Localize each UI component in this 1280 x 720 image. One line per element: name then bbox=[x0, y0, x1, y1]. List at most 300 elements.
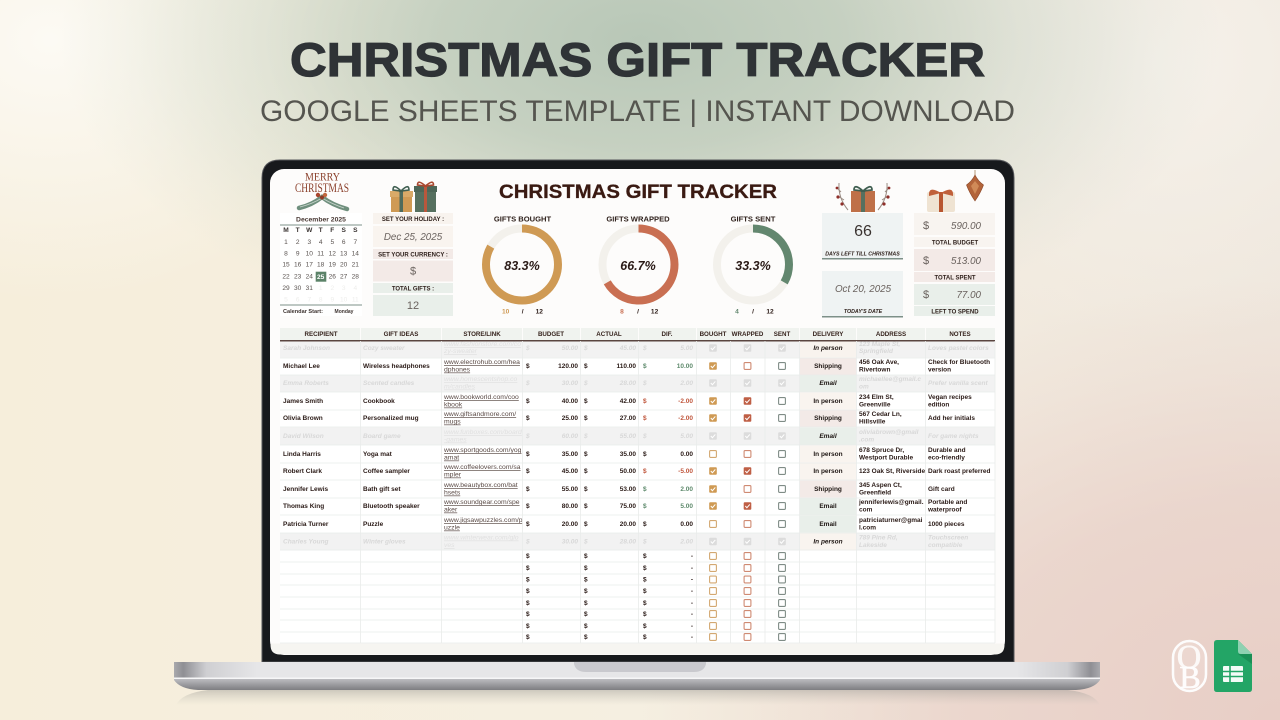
row: James Smith: Greenville bbox=[859, 402, 891, 408]
row: Thomas King: com bbox=[859, 506, 873, 514]
empty rows: - bbox=[691, 576, 693, 584]
calendar grid: 31 bbox=[306, 285, 313, 292]
row: Olivia Brown: Shipping bbox=[814, 415, 842, 422]
row: James Smith: kbook bbox=[444, 402, 463, 408]
row: Michael Lee: dphones bbox=[444, 366, 471, 374]
table header: WRAPPED bbox=[732, 331, 764, 338]
row: Charles Young: compatible bbox=[928, 542, 963, 549]
panel: total spent: TOTAL SPENT bbox=[934, 276, 976, 282]
sheet heading: CHRISTMAS GIFT TRACKER bbox=[499, 181, 777, 203]
row: David Wilson: .com bbox=[859, 436, 874, 444]
calendar grid: 13 bbox=[340, 250, 348, 258]
calendar grid: 1 bbox=[284, 239, 288, 246]
calendar grid: 7 bbox=[353, 239, 357, 246]
row: Charles Young: 789 Pine Rd, bbox=[859, 534, 898, 542]
empty rows: $ bbox=[643, 600, 647, 607]
row: Jennifer Lewis: 2.00 bbox=[680, 486, 693, 493]
row: Robert Clark: Coffee sampler bbox=[363, 468, 410, 475]
row: Linda Harris bbox=[283, 446, 966, 462]
row: Jennifer Lewis: $ bbox=[643, 486, 647, 493]
row: Michael Lee: version bbox=[928, 366, 951, 374]
calendar grid: 5 bbox=[284, 296, 288, 304]
row: Charles Young: www.winterwear.com/glo bbox=[444, 534, 519, 542]
panel: merry christmas logo bbox=[295, 172, 349, 209]
calendar grid: 9 bbox=[330, 296, 334, 304]
row: Charles Young: In person bbox=[813, 538, 843, 546]
row: Michael Lee: 10.00 bbox=[677, 363, 693, 370]
row: Michael Lee: $ bbox=[643, 363, 647, 370]
row: Sarah Johnson: 123 Maple St, bbox=[859, 341, 900, 348]
row: Emma Roberts: $ bbox=[642, 380, 647, 387]
row: Olivia Brown: -2.00 bbox=[678, 415, 693, 422]
panel: days left: 66 bbox=[854, 223, 872, 240]
empty rows: $ bbox=[584, 611, 588, 618]
row: Jennifer Lewis: 53.00 bbox=[620, 486, 636, 493]
table header: BUDGET bbox=[538, 331, 564, 338]
row: David Wilson: 55.00 bbox=[620, 433, 636, 440]
row: Jennifer Lewis: $ bbox=[526, 486, 530, 493]
row: Patricia Turner: www.jigsawpuzzles.com/p bbox=[443, 517, 523, 524]
row: Thomas King: Bluetooth speaker bbox=[363, 503, 420, 510]
row: Sarah Johnson: Loves pastel colors bbox=[928, 345, 989, 352]
empty rows: $ bbox=[584, 553, 588, 560]
calendar grid: 4 bbox=[319, 239, 323, 246]
calendar heading: December 2025 bbox=[296, 216, 346, 224]
row: Emma Roberts: 30.00 bbox=[562, 380, 578, 387]
laptop base bbox=[174, 662, 1100, 690]
calendar grid: 1 bbox=[319, 285, 323, 292]
row: Michael Lee bbox=[283, 358, 990, 375]
row: Charles Young: Lakeside bbox=[859, 542, 887, 549]
row: Michael Lee: Check for Bluetooth bbox=[928, 359, 990, 366]
icon: google sheets bbox=[1214, 640, 1252, 692]
panel: left to spend: $ bbox=[923, 289, 929, 301]
table header: BOUGHT bbox=[700, 331, 727, 338]
empty rows: $ bbox=[584, 565, 588, 572]
panel: days left bbox=[822, 213, 903, 260]
calendar grid: 24 bbox=[306, 274, 313, 280]
calendar grid: 12 bbox=[329, 250, 336, 258]
row: Patricia Turner: l.com bbox=[859, 524, 876, 532]
row: Charles Young: $ bbox=[525, 538, 530, 546]
row: Emma Roberts: Scented candles bbox=[363, 380, 415, 387]
row: Sarah Johnson: zy-sweater bbox=[443, 348, 478, 355]
row: Jennifer Lewis: $ bbox=[584, 486, 588, 493]
empty rows: $ bbox=[526, 588, 530, 595]
calendar grid: 10 bbox=[306, 250, 313, 258]
empty rows: $ bbox=[526, 600, 530, 607]
row: Charles Young: 28.00 bbox=[619, 538, 636, 546]
calendar start: Calendar Start: bbox=[283, 309, 323, 315]
row: Sarah Johnson: $ bbox=[642, 345, 647, 352]
icon: ornament bbox=[966, 170, 984, 201]
empty rows: $ bbox=[584, 623, 588, 630]
row: Charles Young: 2.00 bbox=[679, 538, 693, 546]
panel: today's date bbox=[822, 271, 903, 318]
empty rows: $ bbox=[643, 634, 647, 641]
chart: gifts sent: 4 bbox=[735, 308, 739, 316]
row: David Wilson: Board game bbox=[363, 433, 401, 440]
row: Olivia Brown: Hillsville bbox=[859, 418, 886, 426]
row: Olivia Brown: Olivia Brown bbox=[283, 415, 323, 422]
row: Emma Roberts: www.homescentshop.co bbox=[444, 376, 518, 383]
row: Linda Harris: Westport Durable bbox=[859, 454, 913, 462]
row: Patricia Turner: 20.00 bbox=[620, 521, 636, 528]
table header: ACTUAL bbox=[596, 331, 622, 338]
row: Michael Lee: 110.00 bbox=[616, 363, 636, 370]
calendar grid: 11 bbox=[317, 250, 324, 258]
empty rows: - bbox=[691, 600, 693, 607]
empty rows: $ bbox=[643, 565, 647, 572]
row: Patricia Turner: 0.00 bbox=[680, 521, 693, 528]
table body background bbox=[280, 342, 995, 644]
calendar grid: S bbox=[341, 227, 346, 234]
row: Olivia Brown: Personalized mug bbox=[363, 415, 419, 422]
row: James Smith: 234 Elm St, bbox=[859, 394, 894, 401]
empty rows: - bbox=[691, 588, 693, 595]
calendar grid: 8 bbox=[284, 250, 288, 258]
row: Thomas King: Portable and bbox=[928, 499, 967, 506]
row: James Smith: Cookbook bbox=[363, 398, 395, 405]
total gifts value: 12 bbox=[407, 300, 419, 312]
row: Patricia Turner: patriciaturner@gmai bbox=[859, 517, 923, 524]
calendar grid: 4 bbox=[353, 285, 357, 292]
row: Patricia Turner: $ bbox=[643, 521, 647, 528]
row: Thomas King: Email bbox=[819, 503, 837, 510]
chart: gifts wrapped: 8 bbox=[620, 308, 624, 316]
row: Patricia Turner: Puzzle bbox=[363, 521, 384, 528]
row: Jennifer Lewis: hsets bbox=[444, 490, 461, 496]
row: Linda Harris: Yoga mat bbox=[363, 451, 393, 458]
row: Emma Roberts bbox=[280, 375, 995, 392]
row: Michael Lee: Shipping bbox=[814, 363, 842, 370]
chart: gifts wrapped: GIFTS WRAPPED bbox=[606, 214, 670, 224]
row: Jennifer Lewis: Shipping bbox=[814, 486, 842, 493]
laptop reflection bbox=[176, 690, 1100, 705]
row: James Smith: Vegan recipes bbox=[928, 394, 972, 401]
row: Emma Roberts: om bbox=[859, 384, 869, 390]
row: Robert Clark: mpler bbox=[444, 472, 462, 478]
holiday date: Dec 25, 2025 bbox=[384, 232, 443, 243]
row: Michael Lee: Michael Lee bbox=[283, 363, 320, 370]
total gifts label: TOTAL GIFTS : bbox=[392, 286, 434, 292]
panel: total spent: $ bbox=[923, 255, 929, 267]
calendar grid: M bbox=[283, 227, 289, 234]
row: Linda Harris: www.sportgoods.com/yog bbox=[443, 447, 522, 454]
panel: days left: DAYS LEFT TILL CHRISTMAS bbox=[825, 252, 900, 258]
row: Robert Clark: Robert Clark bbox=[283, 468, 322, 475]
row: Thomas King: 5.00 bbox=[680, 503, 693, 510]
calendar grid: W bbox=[306, 227, 313, 234]
row: Linda Harris: $ bbox=[584, 451, 588, 458]
panel: left to spend: 77.00 bbox=[956, 290, 982, 301]
row: Linda Harris: 35.00 bbox=[620, 451, 636, 458]
row: James Smith: $ bbox=[584, 398, 588, 405]
chart: gifts sent: / bbox=[752, 308, 754, 316]
row: Jennifer Lewis: 55.00 bbox=[562, 486, 578, 493]
empty rows: $ bbox=[643, 553, 647, 560]
row: Charles Young: Charles Young bbox=[283, 538, 329, 546]
row: Olivia Brown: www.giftsandmore.com/ bbox=[443, 411, 516, 418]
row: Michael Lee: 456 Oak Ave, bbox=[859, 359, 899, 366]
row: Jennifer Lewis: Greenfield bbox=[859, 490, 891, 496]
row: Linda Harris: 0.00 bbox=[680, 451, 693, 458]
row: Sarah Johnson: www.fashionstore.com/co bbox=[444, 341, 521, 348]
empty rows: $ bbox=[526, 565, 530, 572]
row: Emma Roberts: Emma Roberts bbox=[283, 380, 329, 387]
row: Charles Young: Winter gloves bbox=[363, 538, 406, 546]
row: Thomas King: $ bbox=[526, 503, 530, 510]
chart: gifts wrapped bbox=[602, 214, 674, 316]
calendar grid: 14 bbox=[352, 250, 359, 258]
row: Sarah Johnson: Sarah Johnson bbox=[283, 345, 330, 352]
chart: gifts wrapped: 66.7% bbox=[620, 259, 656, 273]
row: Patricia Turner: Email bbox=[819, 521, 837, 528]
row: Robert Clark: 50.00 bbox=[620, 468, 636, 475]
empty rows bbox=[526, 553, 785, 641]
row: Sarah Johnson: Cozy sweater bbox=[363, 345, 405, 352]
panel: holiday, currency, total gifts bbox=[373, 213, 453, 316]
row: Robert Clark: $ bbox=[526, 468, 530, 475]
row: Emma Roberts: Email bbox=[819, 380, 837, 387]
row: Emma Roberts: m/candles bbox=[444, 384, 476, 390]
row: Sarah Johnson: 50.00 bbox=[562, 345, 578, 352]
chart: gifts bought bbox=[486, 214, 558, 316]
row: Charles Young: 30.00 bbox=[562, 538, 578, 546]
row: Linda Harris: Linda Harris bbox=[283, 451, 321, 458]
row: Patricia Turner: $ bbox=[526, 521, 530, 528]
row: Linda Harris: Durable and bbox=[928, 447, 966, 454]
row: Olivia Brown: $ bbox=[584, 415, 588, 422]
row: Olivia Brown: 25.00 bbox=[562, 415, 578, 422]
calendar start: Monday bbox=[335, 309, 354, 315]
panel: total budget: TOTAL BUDGET bbox=[932, 240, 978, 246]
row: Sarah Johnson: 5.00 bbox=[680, 345, 693, 352]
calendar grid: F bbox=[330, 227, 334, 234]
calendar grid: 17 bbox=[306, 262, 313, 268]
row: Sarah Johnson: In person bbox=[813, 345, 843, 352]
calendar grid: 5 bbox=[330, 239, 334, 246]
icon: cream gift bbox=[927, 190, 955, 212]
row: Thomas King: $ bbox=[584, 503, 588, 510]
row: David Wilson: $ bbox=[642, 433, 647, 440]
row: James Smith: -2.00 bbox=[678, 398, 693, 405]
row: Michael Lee: www.electrohub.com/hea bbox=[443, 359, 520, 366]
row: Linda Harris: eco-friendly bbox=[928, 454, 965, 462]
calendar grid: 26 bbox=[329, 274, 336, 280]
row: Thomas King: $ bbox=[643, 503, 647, 510]
row: Michael Lee: $ bbox=[526, 363, 530, 370]
row: Olivia Brown: mugs bbox=[444, 418, 461, 426]
table header: GIFT IDEAS bbox=[384, 331, 418, 338]
row: Jennifer Lewis bbox=[283, 480, 955, 498]
calendar grid: 2 bbox=[330, 285, 334, 292]
row: Robert Clark: $ bbox=[584, 468, 588, 475]
empty rows: $ bbox=[643, 611, 647, 618]
row: Patricia Turner: uzzle bbox=[444, 524, 460, 532]
row: David Wilson: oliviabrown@gmail bbox=[859, 429, 919, 436]
chart: gifts bought: 83.3% bbox=[504, 259, 540, 273]
chart: gifts sent: GIFTS SENT bbox=[731, 214, 776, 224]
row: James Smith: edition bbox=[928, 402, 949, 408]
calendar grid: 18 bbox=[317, 262, 325, 268]
empty rows: $ bbox=[643, 576, 647, 584]
row: Linda Harris: 35.00 bbox=[562, 451, 578, 458]
row: David Wilson: -games bbox=[444, 436, 467, 444]
row: Linda Harris: 678 Spruce Dr, bbox=[859, 447, 904, 454]
empty rows: $ bbox=[643, 588, 647, 595]
calendar grid: 7 bbox=[307, 296, 311, 304]
row: Olivia Brown: Add her initials bbox=[928, 415, 975, 422]
table header: RECIPIENT bbox=[304, 331, 338, 338]
row: Charles Young: ves bbox=[444, 542, 455, 549]
row: Charles Young: $ bbox=[583, 538, 588, 546]
row: Sarah Johnson: Springfield bbox=[859, 348, 894, 355]
table header: NOTES bbox=[949, 331, 971, 338]
calendar bbox=[280, 213, 362, 316]
table header bbox=[280, 328, 995, 342]
panel: left to spend: LEFT TO SPEND bbox=[931, 310, 979, 316]
calendar grid: 30 bbox=[294, 285, 302, 292]
empty rows: - bbox=[691, 565, 693, 572]
row: James Smith: 42.00 bbox=[620, 398, 636, 405]
empty rows: - bbox=[691, 611, 693, 618]
empty rows: $ bbox=[526, 611, 530, 618]
row: Thomas King: 75.00 bbox=[620, 503, 636, 510]
row: James Smith: $ bbox=[643, 398, 647, 405]
row: Thomas King: www.soundgear.com/spe bbox=[443, 499, 520, 506]
empty rows: $ bbox=[584, 576, 588, 584]
calendar grid: 22 bbox=[282, 274, 290, 280]
panel: left to spend bbox=[914, 284, 995, 316]
icon: OB monogram logo: O bbox=[1177, 639, 1201, 676]
row: Sarah Johnson: $ bbox=[583, 345, 588, 352]
row: James Smith bbox=[283, 392, 972, 410]
row: Robert Clark bbox=[283, 463, 991, 480]
panel: total budget: 590.00 bbox=[951, 221, 982, 232]
row: Emma Roberts: Prefer vanilla scent bbox=[928, 380, 988, 387]
row: Olivia Brown bbox=[283, 410, 975, 427]
calendar grid: 27 bbox=[340, 274, 348, 280]
calendar grid: 6 bbox=[342, 239, 346, 246]
calendar grid bbox=[282, 227, 359, 304]
icon: gift with berries bbox=[836, 183, 890, 212]
calendar grid: 9 bbox=[296, 250, 300, 258]
row: Michael Lee: Rivertown bbox=[859, 366, 890, 374]
empty rows: $ bbox=[584, 600, 588, 607]
panel: merry christmas logo: MERRY bbox=[305, 172, 341, 184]
calendar grid: 8 bbox=[319, 296, 323, 304]
row: Thomas King: waterproof bbox=[927, 506, 962, 514]
row: Emma Roberts: 2.00 bbox=[679, 380, 693, 387]
row: Sarah Johnson: 45.00 bbox=[619, 345, 636, 352]
row: Thomas King: Thomas King bbox=[283, 503, 324, 510]
laptop bezel bbox=[262, 160, 1014, 662]
row: David Wilson: 60.00 bbox=[562, 433, 578, 440]
row: Jennifer Lewis: 345 Aspen Ct, bbox=[859, 482, 902, 489]
table header: STORE/LINK bbox=[463, 331, 501, 338]
row: Linda Harris: $ bbox=[643, 451, 647, 458]
currency label: SET YOUR CURRENCY : bbox=[378, 252, 448, 258]
calendar grid: 10 bbox=[340, 296, 348, 304]
chart: gifts wrapped: 12 bbox=[651, 308, 659, 316]
calendar grid: 3 bbox=[307, 239, 311, 246]
row: David Wilson: $ bbox=[583, 433, 588, 440]
chart: gifts bought: 10 bbox=[502, 308, 510, 316]
holiday label: SET YOUR HOLIDAY : bbox=[382, 217, 444, 223]
row: Michael Lee: 120.00 bbox=[558, 363, 578, 370]
panel: total budget: $ bbox=[923, 220, 929, 232]
row: Charles Young: $ bbox=[642, 538, 647, 546]
empty rows: $ bbox=[526, 623, 530, 630]
row: Thomas King: 80.00 bbox=[562, 503, 578, 510]
row: Patricia Turner: $ bbox=[584, 521, 588, 528]
calendar grid: S bbox=[353, 227, 358, 234]
icon: gift boxes bbox=[390, 182, 437, 212]
row: David Wilson bbox=[280, 428, 995, 445]
row: Michael Lee: $ bbox=[584, 363, 588, 370]
calendar grid: 29 bbox=[282, 285, 290, 292]
row: James Smith: In person bbox=[813, 398, 843, 405]
chart: gifts bought: 12 bbox=[536, 308, 543, 316]
row: Patricia Turner: 20.00 bbox=[562, 521, 578, 528]
empty rows: $ bbox=[584, 634, 588, 641]
empty rows: - bbox=[691, 634, 693, 641]
empty rows: $ bbox=[526, 634, 530, 641]
panel: merry christmas logo: CHRISTMAS bbox=[295, 181, 349, 195]
row: David Wilson: 5.00 bbox=[680, 433, 693, 440]
row: Olivia Brown: $ bbox=[526, 415, 530, 422]
empty rows: - bbox=[691, 553, 693, 560]
row: Jennifer Lewis: Gift card bbox=[928, 486, 955, 493]
icon: OB monogram logo: B bbox=[1179, 659, 1201, 695]
calendar start bbox=[283, 309, 354, 315]
row: Robert Clark: 45.00 bbox=[562, 468, 578, 475]
row: Patricia Turner: Patricia Turner bbox=[283, 521, 329, 528]
row: Thomas King bbox=[283, 498, 967, 515]
chart: gifts sent: 12 bbox=[766, 308, 774, 316]
empty rows: $ bbox=[584, 588, 588, 595]
row: Patricia Turner: 1000 pieces bbox=[928, 521, 965, 528]
sheet screen bbox=[270, 169, 1005, 655]
row: Robert Clark: -5.00 bbox=[678, 468, 693, 475]
panel: today's date: TODAY'S DATE bbox=[844, 309, 883, 315]
calendar grid: 6 bbox=[296, 296, 300, 304]
row: Robert Clark: www.coffeelovers.com/sa bbox=[443, 464, 521, 471]
chart: gifts sent bbox=[717, 214, 789, 316]
panel: today's date: Oct 20, 2025 bbox=[835, 284, 892, 295]
panel: total spent bbox=[914, 249, 995, 282]
panel: total budget bbox=[914, 213, 995, 247]
row: Robert Clark: 123 Oak St, Riverside bbox=[859, 468, 926, 475]
calendar grid: 28 bbox=[352, 274, 359, 280]
empty rows: - bbox=[691, 623, 693, 630]
calendar grid: 21 bbox=[352, 262, 359, 268]
calendar grid: 16 bbox=[294, 262, 302, 268]
row: David Wilson: $ bbox=[525, 433, 530, 440]
row: Jennifer Lewis: Bath gift set bbox=[363, 486, 401, 493]
row: James Smith: www.bookworld.com/coo bbox=[443, 394, 519, 401]
row: David Wilson: Email bbox=[819, 433, 837, 440]
row: Thomas King: jenniferlewis@gmail. bbox=[858, 499, 924, 506]
calendar grid: 15 bbox=[282, 262, 290, 268]
calendar grid: 2 bbox=[296, 239, 300, 246]
currency value: $ bbox=[410, 266, 416, 278]
row: Robert Clark: $ bbox=[643, 468, 647, 475]
calendar grid: 23 bbox=[294, 274, 302, 280]
chart: gifts bought: GIFTS BOUGHT bbox=[494, 214, 552, 224]
laptop bbox=[174, 160, 1100, 705]
